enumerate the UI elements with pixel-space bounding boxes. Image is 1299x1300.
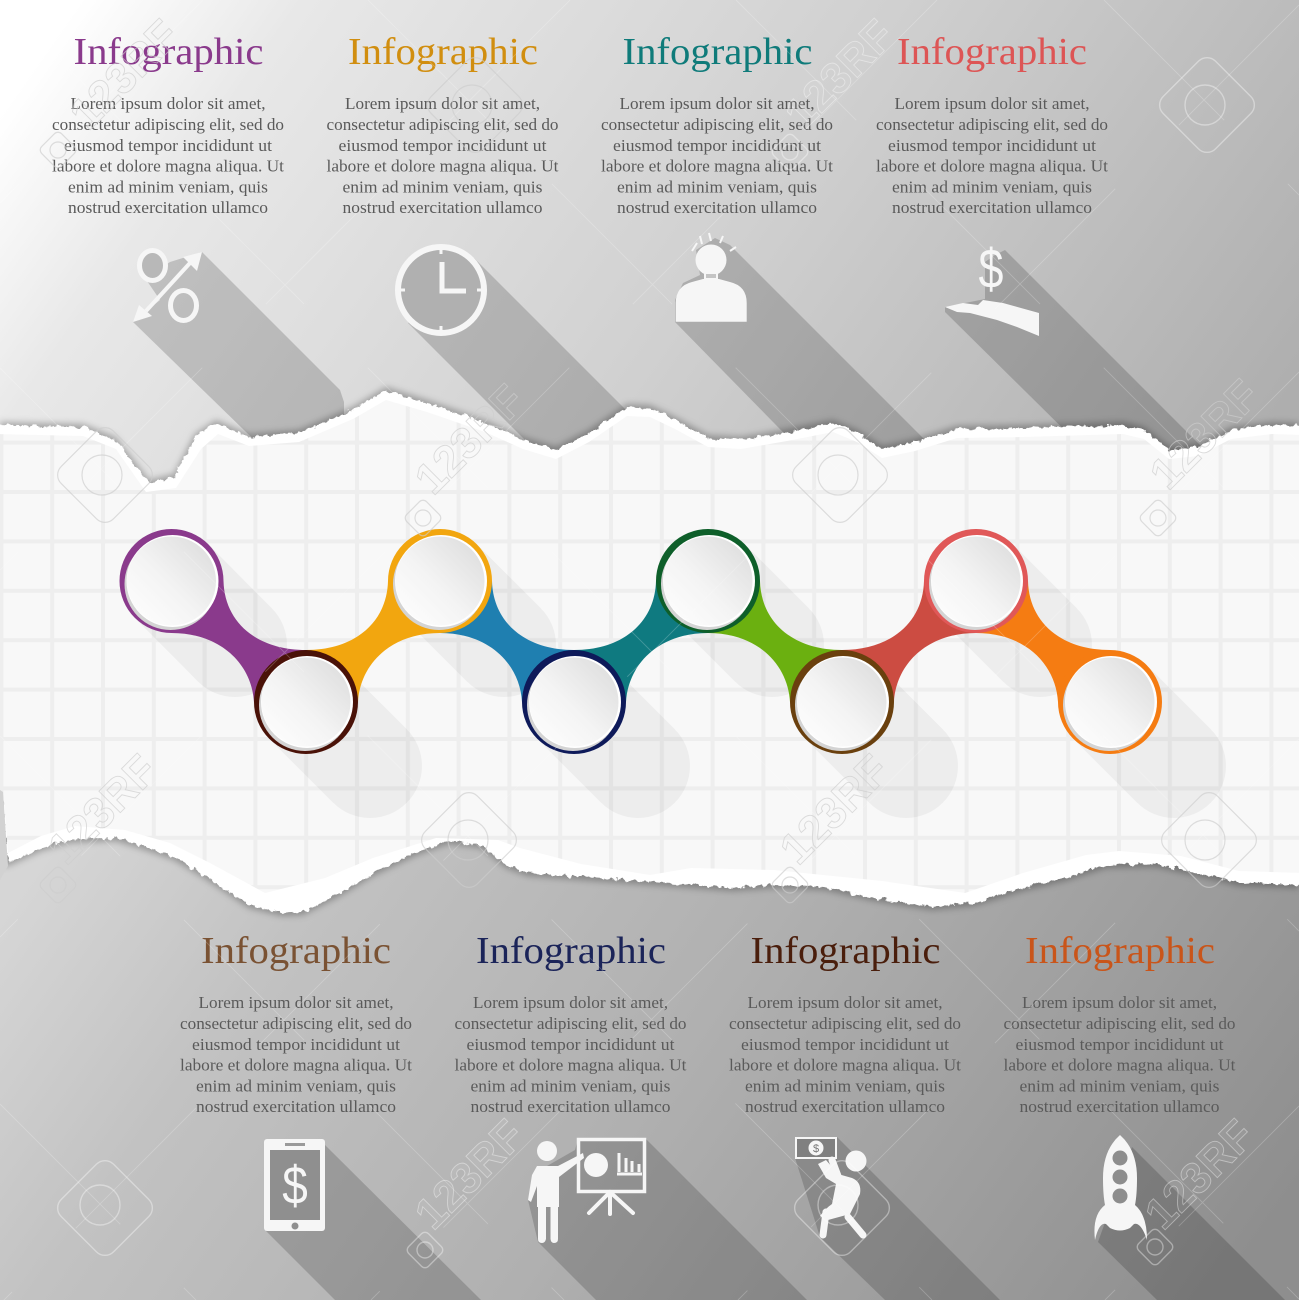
body text: eiusmod tempor incididunt ut bbox=[888, 136, 1096, 155]
heading: Infographic bbox=[897, 31, 1087, 73]
text block: top column 3 bbox=[601, 31, 833, 217]
body text: labore et dolore magna aliqua. Ut bbox=[601, 156, 833, 176]
body text: enim ad minim veniam, quis bbox=[470, 1076, 670, 1096]
watermark stamps on grey areas: 123RF bbox=[406, 1111, 534, 1239]
body text: eiusmod tempor incididunt ut bbox=[1016, 1035, 1224, 1054]
heading: Infographic bbox=[622, 31, 812, 73]
body text: consectetur adipiscing elit, sed do bbox=[876, 115, 1108, 134]
long shadows of top icons bbox=[133, 238, 1230, 475]
body text: labore et dolore magna aliqua. Ut bbox=[52, 156, 284, 176]
body text: eiusmod tempor incididunt ut bbox=[741, 1035, 949, 1054]
body text: labore et dolore magna aliqua. Ut bbox=[454, 1056, 687, 1074]
text block: top column 1 bbox=[52, 31, 284, 217]
body text: nostrud exercitation ullamco bbox=[1020, 1097, 1220, 1116]
body text: eiusmod tempor incididunt ut bbox=[466, 1035, 675, 1054]
body text: nostrud exercitation ullamco bbox=[617, 198, 817, 217]
body text: consectetur adipiscing elit, sed do bbox=[326, 115, 558, 134]
body text: nostrud exercitation ullamco bbox=[470, 1097, 670, 1116]
body text: consectetur adipiscing elit, sed do bbox=[52, 115, 284, 134]
torn paper shadow bbox=[0, 387, 1299, 916]
watermark stamps on paper and light areas: 123RF bbox=[1141, 371, 1269, 499]
body text: Lorem ipsum dolor sit amet, bbox=[1022, 993, 1217, 1012]
panel: bottom grey background bbox=[0, 830, 1299, 1300]
watermark stamps on grey areas: 123RF bbox=[776, 11, 904, 139]
icon: person holding banknote: $ bbox=[813, 1143, 819, 1155]
heading: Infographic bbox=[348, 31, 538, 73]
text block: bottom column 3 bbox=[729, 930, 961, 1116]
watermark stamps on grey areas: 123RF bbox=[1136, 1111, 1264, 1239]
node 6 brown bbox=[790, 650, 894, 754]
body text: labore et dolore magna aliqua. Ut bbox=[326, 156, 559, 176]
node 2 dark brown bbox=[254, 650, 358, 754]
node 7 red bbox=[924, 529, 1028, 633]
watermark stamps on paper and light areas: 123RF bbox=[39, 746, 167, 874]
body text: Lorem ipsum dolor sit amet, bbox=[620, 94, 814, 113]
heading: Infographic bbox=[476, 930, 666, 972]
node 1 purple bbox=[120, 529, 224, 633]
watermark stamps on paper and light areas: 123RF bbox=[61, 11, 189, 139]
body text bbox=[601, 94, 833, 217]
body text: eiusmod tempor incididunt ut bbox=[64, 136, 272, 155]
body text: enim ad minim veniam, quis bbox=[1020, 1076, 1220, 1096]
body text: Lorem ipsum dolor sit amet, bbox=[70, 94, 266, 113]
body text bbox=[180, 993, 412, 1116]
body text: nostrud exercitation ullamco bbox=[342, 198, 542, 217]
icon: percent with arrows bbox=[133, 250, 202, 322]
body text: eiusmod tempor incididunt ut bbox=[613, 136, 821, 155]
coloured connectors bbox=[172, 581, 1110, 702]
heading: Infographic bbox=[201, 930, 391, 972]
icon: hand with dollar: $ bbox=[979, 237, 1003, 300]
left paper tear sliver bbox=[0, 790, 8, 880]
body text bbox=[1004, 993, 1236, 1116]
body text bbox=[454, 993, 687, 1116]
body text: enim ad minim veniam, quis bbox=[892, 178, 1092, 196]
text block: bottom column 4 bbox=[1004, 930, 1236, 1116]
panel: top grey background bbox=[0, 0, 1299, 500]
icon: hand with dollar bbox=[945, 237, 1039, 336]
body text: Lorem ipsum dolor sit amet, bbox=[345, 94, 540, 113]
icon: clock bbox=[398, 247, 484, 333]
body text: consectetur adipiscing elit, sed do bbox=[180, 1014, 412, 1033]
body text: nostrud exercitation ullamco bbox=[68, 198, 268, 217]
body text: eiusmod tempor incididunt ut bbox=[192, 1035, 400, 1054]
icon: person with light bulb bbox=[676, 233, 747, 322]
text block: top column 2 bbox=[326, 31, 559, 217]
body text: nostrud exercitation ullamco bbox=[892, 198, 1092, 217]
body text: enim ad minim veniam, quis bbox=[617, 178, 817, 196]
chart: connected circles timeline bbox=[120, 529, 1174, 766]
icon: tablet with dollar bbox=[264, 1139, 325, 1231]
watermark stamps on paper and light areas bbox=[38, 11, 1269, 905]
body text: consectetur adipiscing elit, sed do bbox=[454, 1014, 686, 1033]
body text: Lorem ipsum dolor sit amet, bbox=[748, 993, 942, 1012]
watermark stamps on paper and light areas: 123RF bbox=[771, 746, 899, 874]
body text: labore et dolore magna aliqua. Ut bbox=[729, 1056, 961, 1074]
node 8 orange bbox=[1058, 650, 1162, 754]
body text: enim ad minim veniam, quis bbox=[342, 178, 542, 196]
text block: top column 4 bbox=[876, 31, 1108, 217]
body text: enim ad minim veniam, quis bbox=[745, 1076, 945, 1096]
body text bbox=[876, 94, 1108, 217]
node 5 green bbox=[656, 529, 760, 633]
long shadows of bottom icons bbox=[266, 1137, 1285, 1300]
body text: Lorem ipsum dolor sit amet, bbox=[894, 94, 1090, 113]
node 4 navy bbox=[522, 650, 626, 754]
body text: nostrud exercitation ullamco bbox=[745, 1097, 945, 1116]
body text bbox=[52, 94, 284, 217]
panel: torn white paper edge bbox=[0, 390, 1299, 913]
body text: Lorem ipsum dolor sit amet, bbox=[473, 993, 668, 1012]
node 3 yellow bbox=[388, 529, 492, 633]
body text: consectetur adipiscing elit, sed do bbox=[601, 115, 833, 134]
heading: Infographic bbox=[1025, 930, 1215, 972]
body text: eiusmod tempor incididunt ut bbox=[338, 136, 547, 155]
icon: tablet with dollar: $ bbox=[282, 1156, 308, 1216]
body text: labore et dolore magna aliqua. Ut bbox=[1004, 1056, 1236, 1074]
body text bbox=[729, 993, 961, 1116]
body text: labore et dolore magna aliqua. Ut bbox=[876, 156, 1108, 176]
icon: rocket bbox=[1094, 1135, 1147, 1240]
body text: nostrud exercitation ullamco bbox=[196, 1097, 396, 1116]
body text: labore et dolore magna aliqua. Ut bbox=[180, 1056, 412, 1074]
heading: Infographic bbox=[74, 31, 264, 73]
body text: consectetur adipiscing elit, sed do bbox=[1004, 1014, 1236, 1033]
icon: person holding banknote bbox=[796, 1138, 866, 1235]
body text: Lorem ipsum dolor sit amet, bbox=[198, 993, 394, 1012]
text block: bottom column 2 bbox=[454, 930, 687, 1116]
icon: presenter with chart board bbox=[528, 1140, 644, 1243]
watermark stamps on paper and light areas: 123RF bbox=[406, 376, 534, 504]
text block: bottom column 1 bbox=[180, 930, 412, 1116]
body text: enim ad minim veniam, quis bbox=[68, 178, 268, 196]
heading: Infographic bbox=[750, 930, 940, 972]
body text: enim ad minim veniam, quis bbox=[196, 1076, 396, 1096]
panel: grid paper bbox=[0, 400, 1299, 893]
circle long shadows bbox=[172, 581, 1174, 766]
body text: consectetur adipiscing elit, sed do bbox=[729, 1014, 961, 1033]
body text bbox=[326, 94, 559, 217]
